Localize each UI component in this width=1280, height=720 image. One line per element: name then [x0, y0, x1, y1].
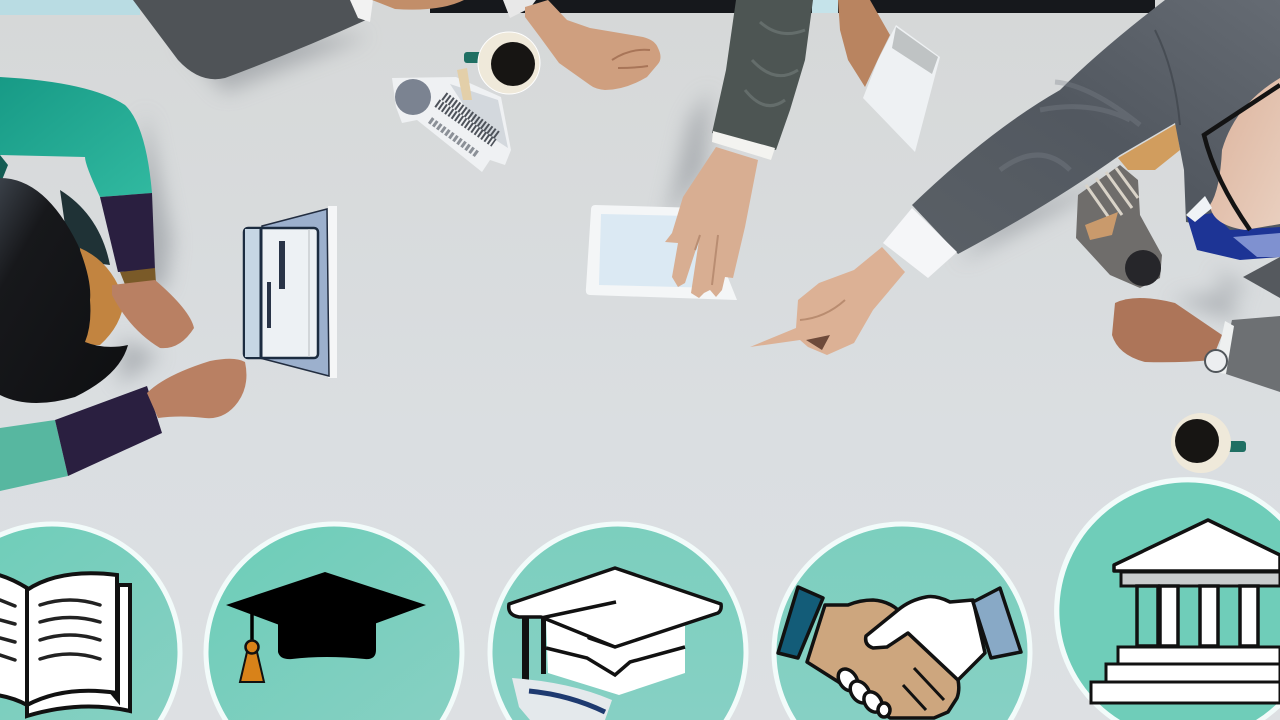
icon circle: graduation cap black	[204, 522, 464, 720]
icon circle: handshake	[772, 522, 1032, 720]
person: right lower arm, hand and watch	[1112, 298, 1280, 392]
round document on right of table	[1076, 165, 1162, 288]
coffee cup bottom right	[1171, 413, 1246, 473]
person: top centre arm and hand	[503, 0, 660, 90]
person: bald man head with glasses and blue tie	[1186, 78, 1280, 260]
hand on tablet	[665, 147, 758, 298]
coffee cup top	[464, 32, 540, 94]
soft shadows under people	[120, 35, 1250, 385]
icon circle: open book	[0, 522, 183, 720]
person: pointing hand	[750, 247, 905, 355]
person: top left suit arm	[133, 0, 464, 79]
tablet	[586, 205, 737, 300]
person: woman with teal sweater	[0, 77, 246, 491]
paper held at top right	[863, 25, 940, 152]
laptop	[244, 206, 337, 378]
person: hand holding paper at top	[838, 0, 890, 87]
person: forearm behind right suit	[1118, 124, 1180, 170]
icon circle: classical building	[1054, 477, 1280, 720]
person: right suit arm and torso	[883, 0, 1280, 298]
icon circle: white graduation cap on books	[488, 522, 748, 720]
person: centre suit sleeve	[712, 0, 813, 160]
newspaper on table	[392, 68, 511, 172]
